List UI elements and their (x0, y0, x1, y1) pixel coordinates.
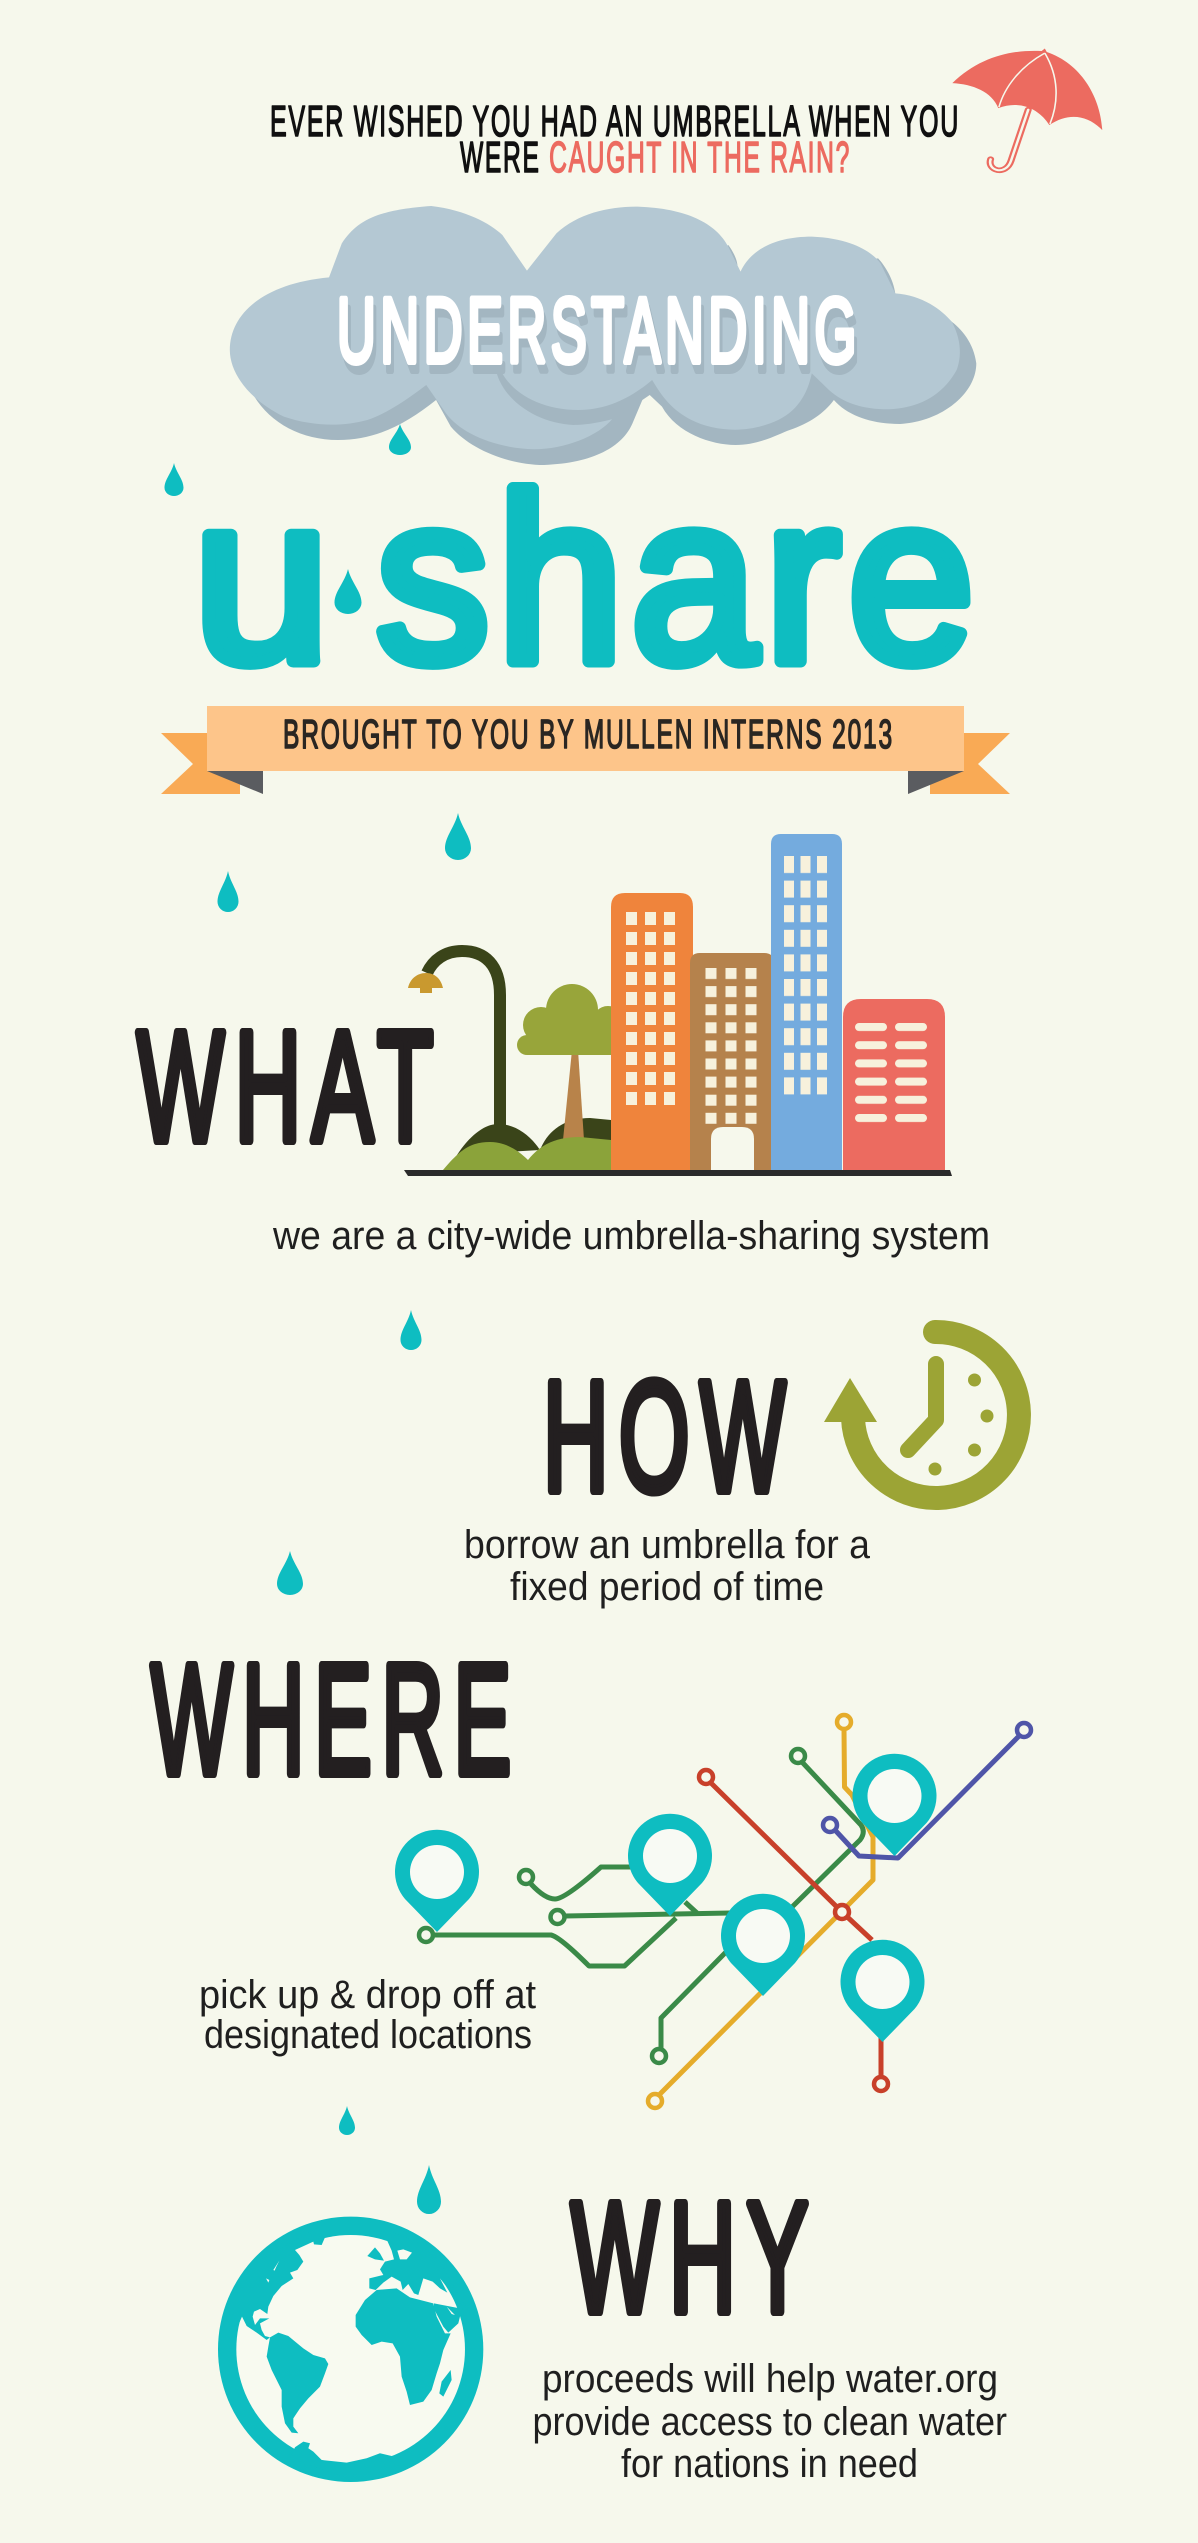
panel: where (151, 1632, 1031, 2108)
hudson bay detail (266, 2261, 279, 2283)
cloud with title word (230, 206, 976, 465)
where description: pick up & drop off at (199, 1973, 536, 2017)
panel: how (464, 1332, 1019, 1609)
ribbon right fold (908, 771, 964, 794)
madagascar (439, 2370, 452, 2397)
yellow line (660, 1729, 873, 2094)
transit map (419, 1715, 1031, 2108)
drop (400, 1310, 422, 1350)
ribbon banner (161, 706, 1010, 794)
africa (356, 2288, 451, 2405)
panel: why (218, 2170, 1007, 2486)
orange building (611, 893, 693, 1170)
header line 2: WERE CAUGHT IN THE RAIN? (460, 133, 851, 182)
ribbon band (207, 706, 964, 771)
how description: borrow an umbrella for a (464, 1523, 871, 1567)
heading: how: HOW (543, 1350, 796, 1524)
icon: globe (218, 2217, 483, 2482)
red line (711, 1783, 881, 2077)
ribbon right tail (930, 733, 1010, 794)
uk (367, 2247, 384, 2261)
drop (339, 2106, 355, 2135)
drop (277, 1551, 303, 1595)
blue building (771, 834, 842, 1170)
heading: what: WHAT (137, 1000, 444, 1174)
why description: for nations in need (621, 2442, 918, 2486)
brown building (690, 953, 774, 1170)
baltic detail (397, 2249, 455, 2315)
why description: provide access to clean water (532, 2400, 1007, 2444)
stations (419, 1715, 1031, 2108)
green branch lower (433, 1918, 676, 1966)
map pin 4 (852, 1754, 936, 1856)
map pin 1 (395, 1830, 479, 1932)
where description (199, 1973, 536, 2057)
green branch upper (531, 1867, 697, 1913)
drop (389, 424, 411, 455)
why description (532, 2357, 1007, 2486)
green line long (661, 1762, 863, 2048)
green branch middle (565, 1913, 730, 1916)
hills (457, 1118, 611, 1155)
ribbon left fold (207, 771, 263, 794)
blue line (835, 1736, 1019, 1858)
panel: what (137, 834, 990, 1258)
eurasia (369, 2230, 468, 2333)
icon: clock with arrow (824, 1332, 1019, 1498)
ribbon left tail (161, 733, 240, 794)
header question (270, 97, 960, 182)
drop (417, 2165, 441, 2214)
south america (267, 2333, 328, 2433)
logo word share: share (376, 447, 982, 712)
logo letter u: u (193, 447, 330, 712)
rain drops (164, 424, 471, 2214)
logo drop (334, 569, 362, 614)
what description: we are a city-wide umbrella-sharing system (272, 1214, 990, 1258)
drop (164, 463, 184, 496)
why description: proceeds will help water.org (542, 2357, 998, 2401)
map pin 5 (841, 1940, 925, 2042)
how description (464, 1523, 871, 1609)
how description: fixed period of time (510, 1565, 824, 1609)
map pin 3 (721, 1894, 805, 1996)
street lamp (408, 951, 500, 1126)
drop (218, 871, 238, 912)
tree (517, 984, 624, 1140)
cloud art (230, 206, 976, 465)
heading: why: WHY (571, 2170, 819, 2346)
red building (843, 999, 945, 1170)
where description: designated locations (204, 2013, 532, 2057)
drop (445, 813, 471, 860)
north america (227, 2223, 325, 2340)
heading: where: WHERE (151, 1632, 521, 1808)
logo: u-share (193, 447, 982, 712)
city illustration (404, 834, 952, 1176)
antarctica (290, 2442, 410, 2477)
map pin 2 (628, 1814, 712, 1916)
ground line (404, 1170, 952, 1176)
front hills (443, 1137, 611, 1170)
icon: umbrella (952, 48, 1102, 170)
